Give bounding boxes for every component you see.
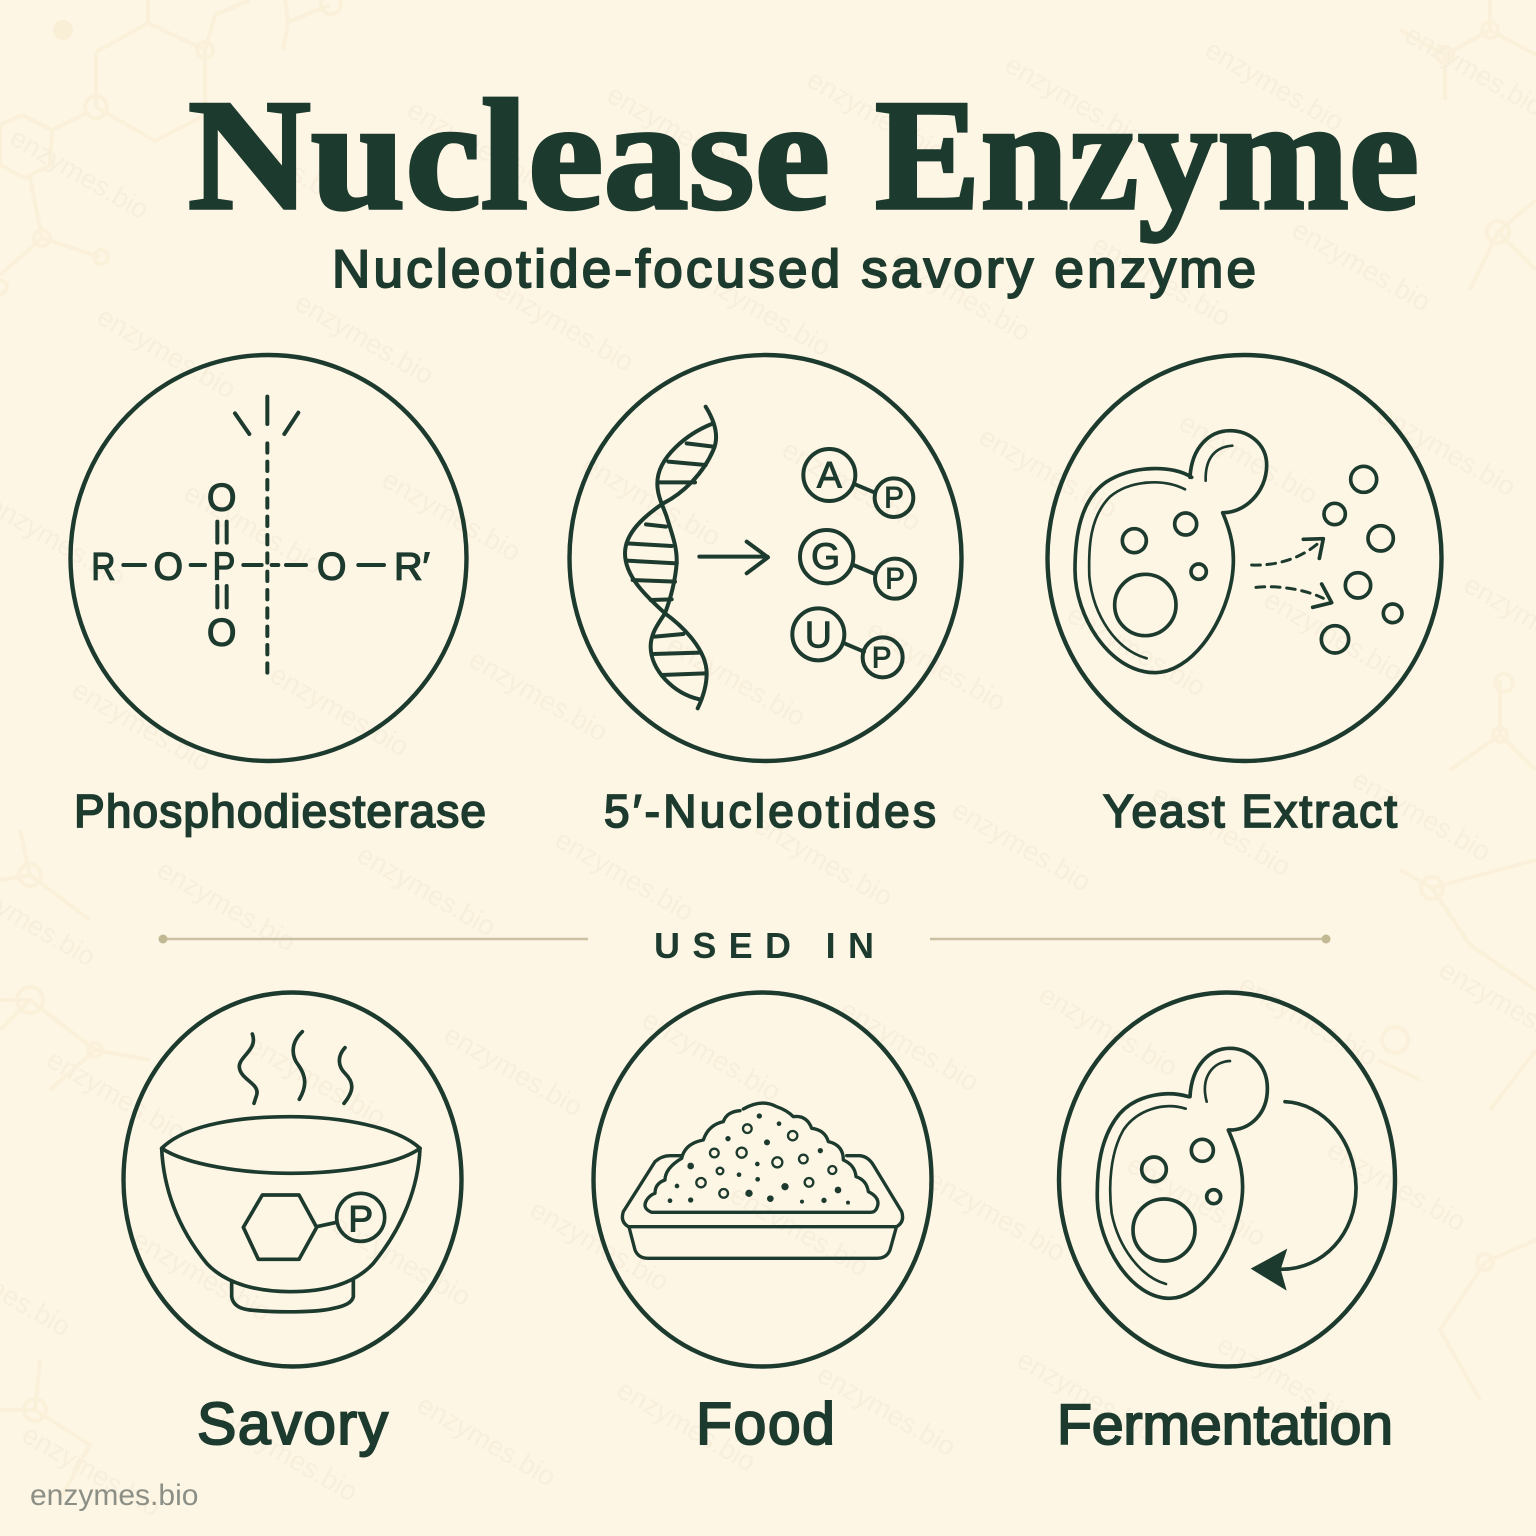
infographic canvas: enzymes.bio bbox=[835, 993, 984, 1097]
infographic canvas: enzymes.bio bbox=[862, 613, 1011, 717]
infographic canvas: enzymes.bio bbox=[464, 643, 613, 747]
infographic canvas: enzymes.bio bbox=[5, 121, 154, 225]
infographic canvas: enzymes.bio bbox=[402, 93, 551, 197]
infographic canvas: enzymes.bio bbox=[1034, 978, 1183, 1082]
panel: food bbox=[594, 992, 932, 1457]
icon: DNA helix to nucleotides: G bbox=[811, 535, 840, 577]
infographic canvas: enzymes.bio bbox=[612, 1373, 761, 1477]
infographic canvas: enzymes.bio bbox=[490, 273, 639, 377]
infographic canvas: enzymes.bio bbox=[42, 1043, 191, 1147]
infographic canvas: enzymes.bio bbox=[242, 1028, 391, 1132]
infographic canvas: enzymes.bio bbox=[92, 300, 241, 404]
title bbox=[188, 68, 1419, 243]
infographic canvas: enzymes.bio bbox=[265, 658, 414, 762]
infographic canvas: enzymes.bio bbox=[179, 476, 328, 580]
icon: phosphodiester bond cleavage: R′ bbox=[394, 544, 430, 588]
label: Savory bbox=[197, 1391, 388, 1457]
icon: DNA helix to nucleotides: P bbox=[884, 482, 904, 515]
infographic canvas: enzymes.bio bbox=[577, 448, 726, 552]
infographic canvas: enzymes.bio bbox=[749, 808, 898, 912]
label: Food bbox=[696, 1391, 835, 1457]
infographic canvas: enzymes.bio bbox=[377, 463, 526, 567]
title: Nuclease bbox=[188, 68, 830, 243]
infographic canvas: enzymes.bio bbox=[152, 853, 301, 957]
infographic canvas: enzymes.bio bbox=[1347, 763, 1496, 867]
circle frame bbox=[594, 992, 932, 1366]
infographic canvas: enzymes.bio bbox=[947, 793, 1096, 897]
infographic canvas: enzymes.bio bbox=[812, 1358, 961, 1462]
icon: seasoning in a tray bbox=[622, 1103, 903, 1258]
icon: DNA helix to nucleotides: A bbox=[817, 453, 842, 495]
label: Fermentation bbox=[1057, 1393, 1393, 1457]
section divider: used in: USED IN bbox=[654, 925, 874, 966]
panel: 5'-nucleotides bbox=[570, 355, 962, 837]
icon: yeast cell with cycle arrow bbox=[1097, 1048, 1356, 1298]
icon: phosphodiester bond cleavage: P bbox=[213, 544, 235, 588]
icon: DNA helix to nucleotides: U bbox=[805, 613, 832, 655]
infographic canvas: enzymes.bio bbox=[802, 63, 951, 167]
icon: phosphodiester bond cleavage: O bbox=[154, 544, 183, 588]
icon: phosphodiester bond cleavage: O bbox=[317, 544, 346, 588]
infographic canvas: enzymes.bio bbox=[725, 1178, 874, 1282]
subtitle: Nucleotide-focused savory enzyme bbox=[332, 240, 1256, 299]
infographic canvas: enzymes.bio bbox=[1087, 228, 1236, 332]
title: Enzyme bbox=[875, 68, 1419, 243]
infographic canvas: enzymes.bio bbox=[974, 420, 1123, 524]
infographic canvas: enzymes.bio bbox=[1147, 778, 1296, 882]
infographic canvas: enzymes.bio bbox=[1234, 968, 1383, 1072]
icon: steaming bowl with nucleotide: P bbox=[348, 1198, 373, 1240]
panel: phosphodiesterase bbox=[70, 355, 486, 837]
infographic canvas: enzymes.bio bbox=[352, 838, 501, 942]
infographic canvas: enzymes.bio bbox=[67, 673, 216, 777]
circle frame bbox=[70, 355, 466, 761]
icon: yeast cell releasing particles bbox=[1075, 431, 1402, 673]
circle frame bbox=[1059, 992, 1395, 1366]
infographic canvas: enzymes.bio bbox=[202, 108, 351, 212]
panel: fermentation bbox=[1057, 992, 1395, 1457]
infographic canvas: enzymes.bio bbox=[602, 78, 751, 182]
infographic canvas: enzymes.bio bbox=[412, 1388, 561, 1492]
infographic canvas: enzymes.bio bbox=[290, 286, 439, 390]
infographic canvas: enzymes.bio bbox=[214, 1403, 363, 1507]
label: Phosphodiesterase bbox=[74, 785, 486, 837]
infographic canvas: enzymes.bio bbox=[637, 1003, 786, 1107]
infographic canvas: enzymes.bio bbox=[687, 258, 836, 362]
infographic canvas: enzymes.bio bbox=[1372, 398, 1521, 502]
infographic canvas: enzymes.bio bbox=[550, 823, 699, 927]
icon: DNA helix to nucleotides: P bbox=[872, 641, 891, 674]
circle frame bbox=[124, 992, 462, 1366]
infographic canvas: enzymes.bio bbox=[439, 1018, 588, 1122]
section divider: used in bbox=[158, 925, 1330, 966]
infographic canvas: enzymes.bio bbox=[17, 1418, 166, 1522]
source watermark: enzymes.bio bbox=[30, 1479, 198, 1512]
circle frame bbox=[570, 355, 962, 761]
infographic canvas: enzymes.bio bbox=[922, 1163, 1071, 1267]
icon: phosphodiester bond cleavage: R bbox=[91, 544, 115, 588]
icon: phosphodiester bond cleavage: O bbox=[207, 475, 236, 519]
icon: DNA helix to nucleotides: P bbox=[885, 563, 905, 596]
infographic canvas: enzymes.bio bbox=[1122, 1148, 1271, 1252]
label: Yeast Extract bbox=[1103, 785, 1397, 837]
infographic canvas: enzymes.bio bbox=[1212, 1328, 1361, 1432]
icon: phosphodiester bond cleavage bbox=[91, 397, 430, 678]
icon: DNA helix to nucleotides bbox=[625, 407, 915, 708]
icon: phosphodiester bond cleavage: O bbox=[207, 610, 236, 654]
infographic canvas: enzymes.bio bbox=[1000, 48, 1149, 152]
infographic canvas: enzymes.bio bbox=[662, 628, 811, 732]
infographic canvas: enzymes.bio bbox=[525, 1193, 674, 1297]
label: 5′-Nucleotides bbox=[604, 785, 936, 837]
infographic canvas: enzymes.bio bbox=[127, 1223, 276, 1327]
infographic canvas: enzymes.bio bbox=[1322, 1133, 1471, 1237]
panel: savory bbox=[124, 992, 462, 1457]
infographic canvas: enzymes.bio bbox=[777, 433, 926, 537]
infographic canvas: enzymes.bio bbox=[1062, 598, 1211, 702]
circle frame bbox=[1048, 355, 1442, 761]
infographic canvas: enzymes.bio bbox=[1174, 406, 1323, 510]
infographic canvas: enzymes.bio bbox=[1287, 213, 1436, 317]
infographic canvas: enzymes.bio bbox=[327, 1208, 476, 1312]
panel: yeast extract bbox=[1048, 355, 1442, 837]
infographic canvas: enzymes.bio bbox=[1200, 33, 1349, 137]
infographic canvas: enzymes.bio bbox=[887, 243, 1036, 347]
infographic canvas: enzymes.bio bbox=[1012, 1343, 1161, 1447]
infographic canvas: enzymes.bio bbox=[1259, 583, 1408, 687]
icon: steaming bowl with nucleotide bbox=[162, 1032, 420, 1312]
